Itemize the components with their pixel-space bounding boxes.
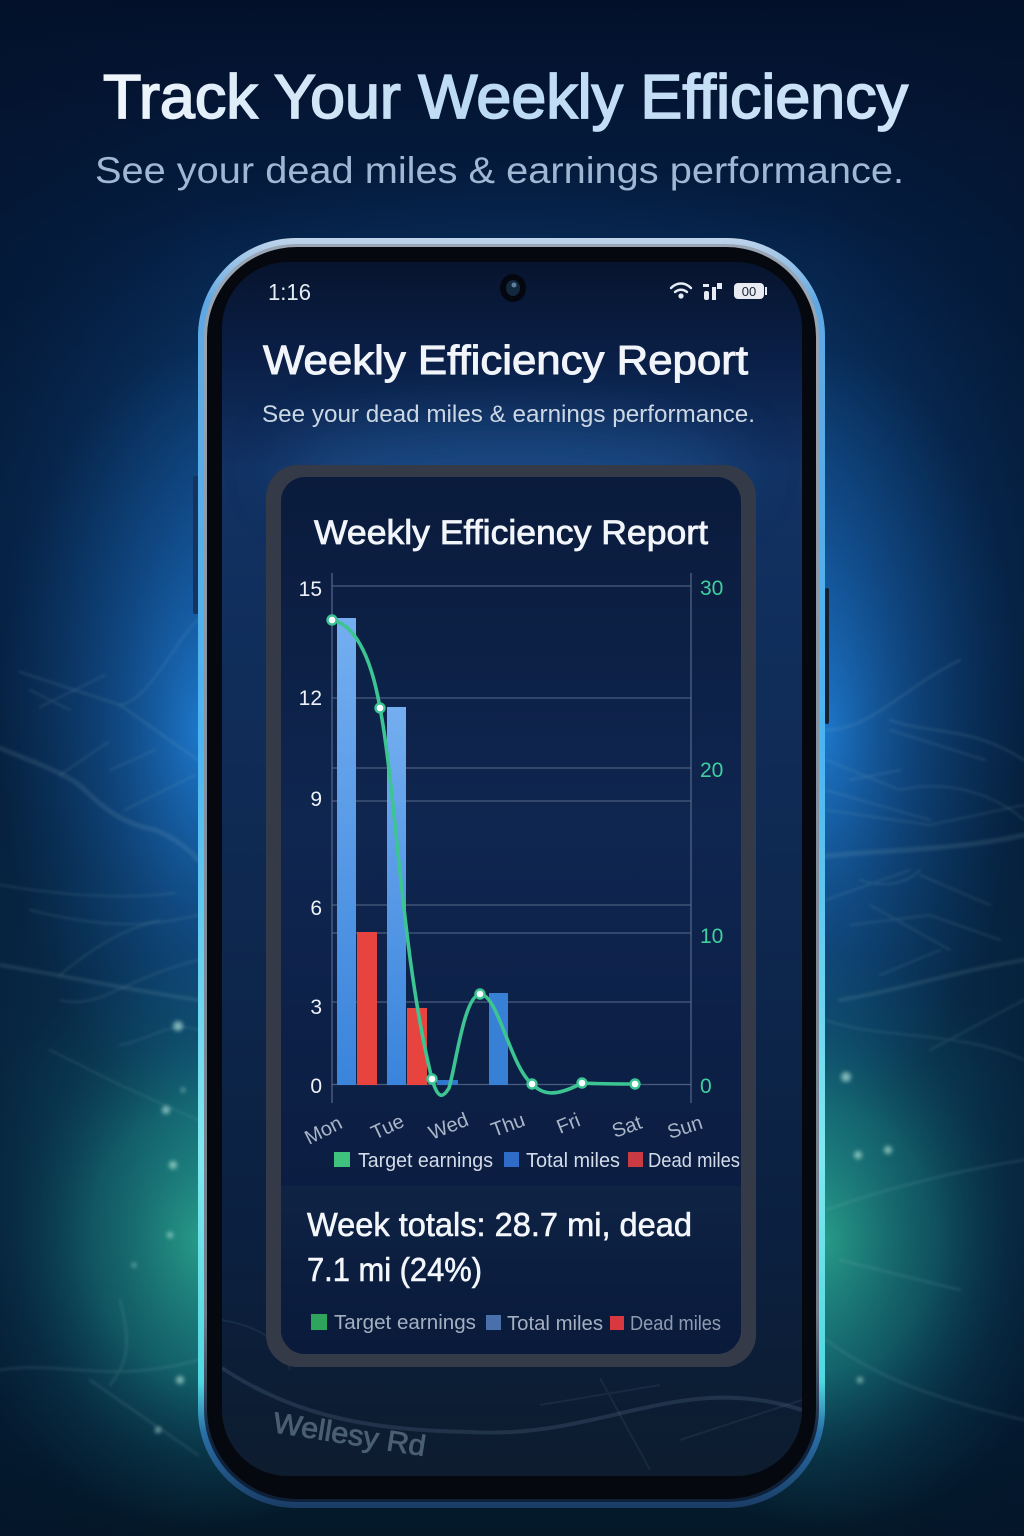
- screen heading: Weekly Efficiency Report: [263, 337, 749, 383]
- right axis labels: 30: [700, 577, 723, 600]
- target earnings line: [328, 616, 640, 1095]
- chart: [299, 573, 723, 1149]
- screen map with road label: Wellesy Rd: [271, 1407, 428, 1463]
- side buttons: [193, 476, 829, 724]
- totals text: [307, 1206, 692, 1288]
- x axis labels: Wed: [426, 1109, 472, 1145]
- phone frame: [198, 238, 825, 1508]
- x axis labels: [301, 1109, 705, 1149]
- left axis labels: 3: [310, 996, 322, 1019]
- chart legend: [334, 1150, 740, 1172]
- x axis labels: Mon: [301, 1112, 346, 1149]
- totals legend: Target earnings: [334, 1312, 476, 1334]
- phone: [193, 238, 829, 1508]
- icon: wifi: [671, 284, 691, 297]
- x axis labels: Tue: [368, 1110, 408, 1145]
- left axis labels: 15: [299, 578, 322, 601]
- screen map with road label: [222, 1320, 802, 1470]
- left axis labels: 12: [299, 687, 322, 710]
- right axis labels: 0: [700, 1075, 712, 1098]
- totals text: 7.1 mi (24%): [307, 1251, 482, 1288]
- panel: week totals: [281, 1186, 741, 1354]
- icon: battery: 00: [742, 284, 756, 299]
- left axis labels: 6: [310, 897, 322, 920]
- phone screen: [222, 262, 802, 1476]
- x axis labels: Thu: [488, 1109, 528, 1142]
- left axis labels: 9: [310, 788, 322, 811]
- right axis labels: 10: [700, 925, 723, 948]
- right axis labels: 20: [700, 759, 723, 782]
- totals legend: Dead miles: [630, 1313, 721, 1335]
- totals legend: [311, 1312, 721, 1335]
- camera: [500, 274, 526, 302]
- background map roads: [0, 620, 1024, 1455]
- grid lines: [332, 573, 691, 1103]
- chart legend: Total miles: [526, 1150, 620, 1172]
- status bar time: 1:16: [268, 279, 311, 305]
- chart legend: Dead miles: [648, 1150, 740, 1172]
- left axis labels: [299, 578, 322, 1098]
- right axis labels: [700, 577, 723, 1098]
- totals legend: Total miles: [507, 1313, 603, 1335]
- subtitle: See your dead miles & earnings performance.: [95, 150, 904, 191]
- totals text: Week totals: 28.7 mi, dead: [307, 1206, 692, 1243]
- x axis labels: Sun: [665, 1112, 705, 1144]
- screen subheading: See your dead miles & earnings performance.: [262, 401, 755, 428]
- background map glow dots: [132, 1021, 892, 1433]
- chart legend: Target earnings: [358, 1150, 493, 1172]
- x axis labels: Sat: [609, 1112, 645, 1143]
- left axis labels: 0: [310, 1075, 322, 1098]
- card heading: Weekly Efficiency Report: [314, 514, 709, 552]
- icon: signal: [703, 283, 722, 300]
- icon: battery: [734, 283, 767, 299]
- bars: [337, 618, 508, 1085]
- title: Track Your Weekly Efficiency: [103, 63, 908, 132]
- panel: report card: [266, 465, 756, 1367]
- x axis labels: Fri: [554, 1109, 584, 1139]
